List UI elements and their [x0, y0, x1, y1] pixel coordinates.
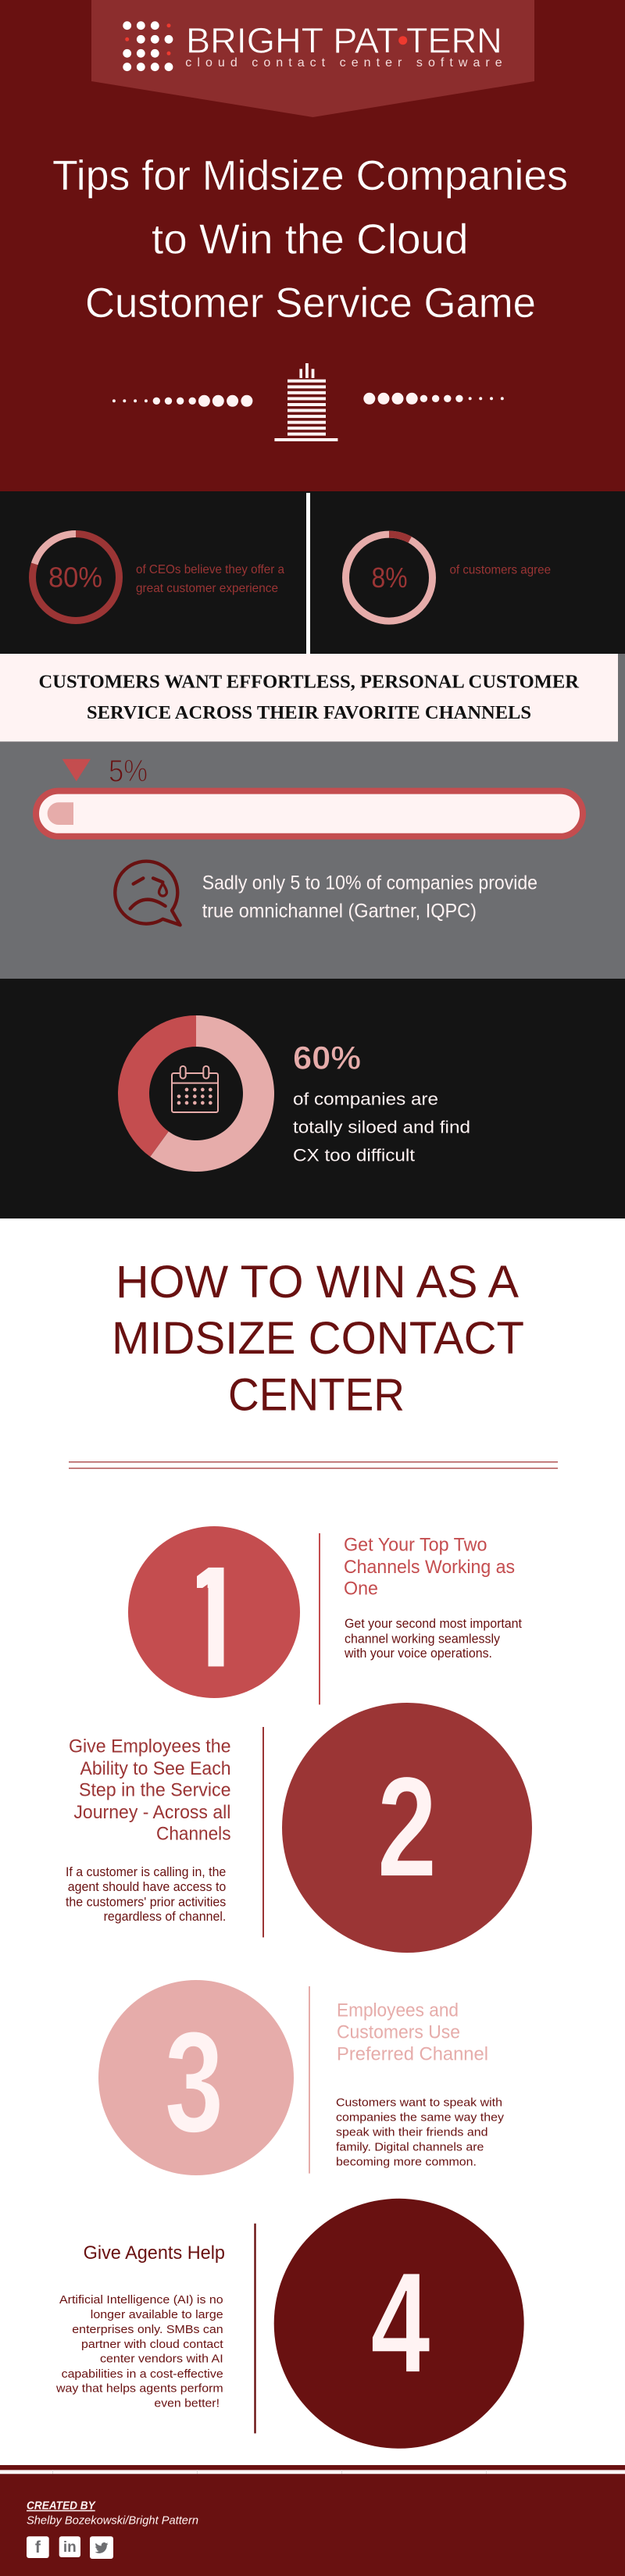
step 4 body: center vendors with AI: [100, 2353, 223, 2366]
step 2 body: [66, 1865, 226, 1924]
icon: office building: [274, 363, 338, 441]
title: Tips for Midsize Companies: [52, 152, 568, 199]
step 3 body: Customers want to speak with: [336, 2096, 502, 2109]
text: customers stat: of customers agree: [450, 564, 551, 577]
text: omnichannel fact: Sadly only 5 to 10% of companies provide: [202, 872, 538, 894]
step 2: [66, 1703, 532, 1953]
text: siloed fact: totally siloed and find: [293, 1118, 470, 1137]
text: CEOs stat: of CEOs believe they offer a: [136, 563, 284, 576]
number circle 4: [274, 2199, 524, 2449]
step 1 body: [344, 1617, 522, 1661]
step 1: [128, 1526, 522, 1704]
step 3 body: becoming more common.: [336, 2157, 477, 2169]
icon: facebook: f: [35, 2539, 41, 2556]
step 2 body: the customers' prior activities: [66, 1895, 226, 1909]
60% figure: 60%: [293, 1040, 361, 1076]
heading band: CUSTOMERS WANT EFFORTLESS, PERSONAL CUSTOMER: [39, 671, 580, 692]
step 4: [55, 2199, 524, 2449]
logo red dot: [398, 36, 407, 45]
step 1 body: Get your second most important: [345, 1617, 522, 1631]
heading band: [0, 654, 618, 741]
heading: how to win: CENTER: [228, 1369, 405, 1420]
step 2 body: regardless of channel.: [104, 1910, 226, 1924]
icon: logo dot grid: [123, 21, 173, 71]
chart: 80% ring: 80%: [48, 561, 102, 593]
step 4 body: way that helps agents perform: [55, 2383, 223, 2396]
step 1 title: Channels Working as: [344, 1557, 515, 1578]
number circle 1: [128, 1526, 300, 1698]
5% label: 5%: [109, 754, 148, 788]
panel: siloed companies: [0, 979, 625, 1218]
step 3 body: [336, 2096, 505, 2169]
step 1 title: One: [344, 1579, 378, 1600]
credit: CREATED BY: [27, 2499, 97, 2513]
step 4 body: Artificial Intelligence (AI) is no: [59, 2294, 223, 2307]
number circle 3: 3: [165, 2003, 223, 2163]
panel: footer: [0, 2465, 625, 2576]
logo tagline: cloud contact center software: [185, 56, 502, 70]
icon: facebook: [27, 2536, 49, 2558]
step 4 body: even better!: [154, 2398, 220, 2410]
step 1 body: channel working seamlessly: [345, 1632, 501, 1646]
icon: calendar: [172, 1066, 218, 1112]
step 2 title: Channels: [156, 1823, 231, 1845]
step 2 title: Ability to See Each: [80, 1758, 231, 1779]
text: siloed fact: [293, 1090, 470, 1165]
step 1 title: Get Your Top Two: [344, 1535, 488, 1556]
step 2 title: Step in the Service: [79, 1780, 231, 1801]
step 2 body: agent should have access to: [68, 1880, 226, 1894]
text: siloed fact: CX too difficult: [293, 1145, 416, 1165]
number circle 1: 1: [178, 1536, 248, 1697]
chart: 8% ring: [345, 534, 433, 621]
step 1 title: [344, 1535, 515, 1600]
step 3 body: companies the same way they: [336, 2111, 505, 2124]
number circle 2: 2: [377, 1747, 437, 1907]
marker triangle: [62, 759, 91, 781]
step 2 title: Journey - Across all: [73, 1802, 230, 1823]
icon: twitter: [90, 2536, 113, 2559]
heading band: SERVICE ACROSS THEIR FAVORITE CHANNELS: [87, 702, 531, 723]
icon: left dot trail: [112, 395, 252, 407]
icon: right dot trail: [363, 393, 504, 405]
step 3 body: speak with their friends and: [336, 2127, 488, 2139]
step 4 title: Give Agents Help: [84, 2242, 225, 2264]
heading: how to win: MIDSIZE CONTACT: [112, 1313, 524, 1364]
step 3 title: Customers Use: [337, 2021, 460, 2043]
panel: omnichannel progress: [0, 654, 625, 979]
step 3: [98, 1980, 505, 2175]
heading: how to win: [112, 1257, 524, 1420]
step 4 body: longer available to large: [91, 2309, 223, 2321]
title: Customer Service Game: [85, 280, 536, 326]
title: [52, 152, 568, 326]
step 4 body: partner with cloud contact: [81, 2339, 223, 2351]
step 3 title: Employees and: [337, 2000, 459, 2021]
chart: 80% ring: [21, 523, 130, 632]
panel: header: [0, 0, 625, 491]
chart: 60% donut: [118, 1015, 274, 1172]
text: omnichannel fact: true omnichannel (Gartner, IQPC): [202, 900, 477, 922]
credit: Shelby Bozekowski/Bright Pattern: [27, 2514, 198, 2528]
text: CEOs stat: great customer experience: [136, 582, 278, 595]
step 1 body: with your voice operations.: [344, 1647, 492, 1661]
step 4 body: capabilities in a cost-effective: [62, 2368, 223, 2381]
number circle 2: [282, 1703, 532, 1953]
icon: linkedin: in: [63, 2539, 77, 2556]
text: siloed fact: of companies are: [293, 1090, 438, 1109]
step 3 title: [337, 2000, 488, 2065]
step 3 body: family. Digital channels are: [336, 2141, 484, 2153]
logo wordmark: BRIGHT PAT: [186, 20, 398, 60]
number circle 4: 4: [370, 2243, 430, 2403]
step 4 body: [55, 2294, 223, 2410]
step 2 title: Give Employees the: [69, 1736, 231, 1757]
panel: CEO vs customer stats: [0, 491, 625, 654]
step 3 title: Preferred Channel: [337, 2043, 488, 2065]
progress bar: [36, 791, 583, 837]
heading: how to win: HOW TO WIN AS A: [116, 1257, 519, 1308]
chart: 8% ring: 8%: [372, 562, 408, 594]
icon: crying speech bubble: [115, 862, 180, 925]
credit: [27, 2499, 198, 2528]
number circle 3: [98, 1980, 294, 2175]
step 2 body: If a customer is calling in, the: [66, 1865, 226, 1879]
step 2 title: [69, 1736, 231, 1845]
icon: linkedin: [59, 2536, 80, 2557]
text: omnichannel fact: [202, 872, 538, 922]
title: to Win the Cloud: [152, 216, 469, 262]
logo banner: [91, 0, 534, 117]
text: CEOs stat: [136, 563, 284, 595]
step 4 body: enterprises only. SMBs can: [72, 2324, 223, 2336]
logo wordmark: TERN: [406, 20, 502, 60]
